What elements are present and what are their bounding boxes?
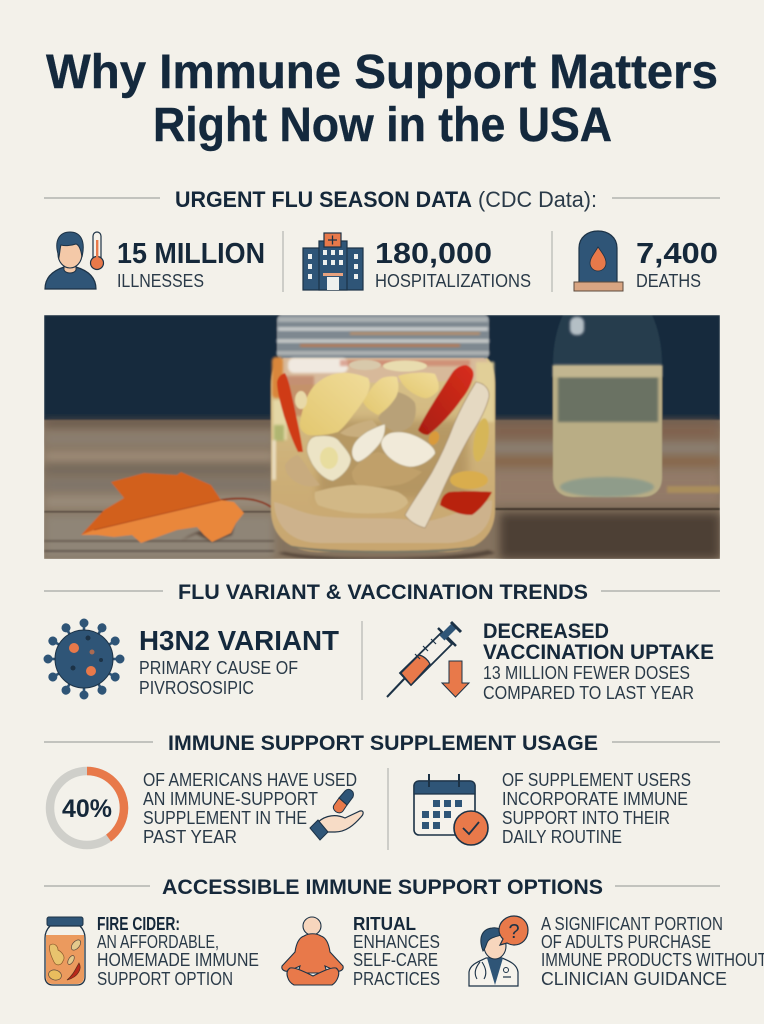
icon: down arrow	[442, 661, 469, 697]
title: Right Now in the USA	[153, 98, 612, 152]
icon: fire cider jar	[45, 917, 85, 985]
panel: decreased vaccination uptake: DECREASED	[483, 619, 609, 643]
icon: sick person with thermometer	[45, 232, 104, 289]
icon: doctor with question bubble	[469, 916, 528, 986]
icon: virus	[45, 620, 123, 698]
title: Why Immune Support Matters	[46, 45, 718, 99]
stat: 15 million illnesses: 15 MILLION	[117, 238, 265, 270]
panel: decreased vaccination uptake: 13 MILLION FEWER DOSES	[483, 663, 690, 683]
panel: 40 percent of Americans: OF AMERICANS HAVE USED	[143, 770, 357, 790]
panel: daily routine: OF SUPPLEMENT USERS	[502, 770, 691, 790]
panel: ritual: ENHANCES	[353, 932, 440, 952]
panel: ritual: RITUAL	[353, 914, 416, 934]
stat: 180,000 hospitalizations: 180,000	[375, 238, 492, 270]
panel: fire cider: AN AFFORDABLE,	[97, 932, 219, 952]
stat: 180,000 hospitalizations: HOSPITALIZATIONS	[375, 271, 531, 291]
panel: H3N2 variant	[45, 620, 339, 698]
panel: ritual	[282, 914, 440, 989]
panel: decreased vaccination uptake: COMPARED TO LAST YEAR	[483, 683, 694, 703]
stat: 15 million illnesses	[45, 232, 265, 291]
panel: decreased vaccination uptake	[387, 619, 714, 703]
heading: accessible immune support options: ACCESSIBLE IMMUNE SUPPORT OPTIONS	[162, 876, 603, 899]
horseradish root	[405, 382, 489, 528]
panel: decreased vaccination uptake: VACCINATION UPTAKE	[483, 640, 714, 664]
jar	[271, 315, 495, 562]
panel: H3N2 variant: PIVROSOSIPIC	[139, 678, 254, 698]
stat: 7,400 deaths: 7,400	[636, 238, 718, 270]
panel: H3N2 variant: PRIMARY CAUSE OF	[139, 658, 298, 678]
panel: fire cider: SUPPORT OPTION	[97, 969, 233, 989]
garlic cloves	[307, 424, 435, 481]
chart: 40% donut	[50, 771, 124, 845]
icon: doctor with question bubble: ?	[508, 921, 520, 943]
chili peppers	[277, 365, 492, 515]
stat: 7,400 deaths: DEATHS	[636, 271, 701, 291]
panel: fire cider: FIRE CIDER:	[97, 914, 180, 934]
top of liquid	[282, 358, 494, 385]
heading: urgent flu season data	[44, 187, 720, 212]
panel: clinician guidance: A SIGNIFICANT PORTION	[541, 914, 723, 934]
panel: daily routine: SUPPORT INTO THEIR	[502, 808, 670, 828]
panel: fire cider	[45, 914, 259, 989]
panel: daily routine: INCORPORATE IMMUNE	[502, 789, 688, 809]
glass bottle	[553, 315, 662, 497]
ginger pieces	[285, 360, 492, 514]
wooden table	[44, 420, 720, 559]
heading: urgent flu season data: URGENT FLU SEASON DATA	[175, 187, 472, 212]
panel: 40 percent of Americans: PAST YEAR	[143, 827, 237, 847]
panel: ritual: SELF-CARE	[353, 950, 438, 970]
dark backdrop	[44, 315, 720, 421]
chart: 40% donut: 40%	[62, 795, 112, 823]
icon: hospital building	[303, 233, 363, 290]
panel: 40 percent of Americans: AN IMMUNE-SUPPORT	[143, 789, 318, 809]
panel: daily routine: DAILY ROUTINE	[502, 827, 622, 847]
panel: ritual: PRACTICES	[353, 969, 440, 989]
title	[46, 45, 718, 152]
panel: clinician guidance: OF ADULTS PURCHASE	[541, 932, 711, 952]
stat: 15 million illnesses: ILLNESSES	[117, 271, 204, 291]
stat: 180,000 hospitalizations	[303, 233, 531, 291]
heading: immune support supplement usage: IMMUNE SUPPORT SUPPLEMENT USAGE	[168, 732, 598, 755]
icon: headstone with flame	[574, 231, 623, 291]
icon: meditating person	[282, 917, 343, 985]
icon: syringe	[387, 622, 461, 697]
icon: calendar with check	[414, 774, 488, 845]
stat: 7,400 deaths	[574, 231, 718, 291]
sediment	[274, 500, 492, 543]
heading: flu variant and vaccination trends: FLU VARIANT & VACCINATION TRENDS	[178, 581, 588, 604]
panel: fire cider: HOMEMADE IMMUNE	[97, 950, 259, 970]
panel: 40 percent of Americans: SUPPLEMENT IN THE	[143, 808, 307, 828]
icon: hand with capsule	[310, 789, 363, 840]
panel: clinician guidance: CLINICIAN GUIDANCE	[541, 969, 727, 989]
photo: fire cider jar on wooden table	[44, 315, 720, 562]
panel: daily routine	[414, 770, 691, 847]
panel: 40 percent of Americans	[50, 770, 363, 847]
leaf	[81, 472, 271, 543]
panel: H3N2 variant: H3N2 VARIANT	[139, 625, 339, 656]
heading: urgent flu season data: (CDC Data):	[478, 187, 597, 212]
panel: clinician guidance	[469, 914, 764, 989]
